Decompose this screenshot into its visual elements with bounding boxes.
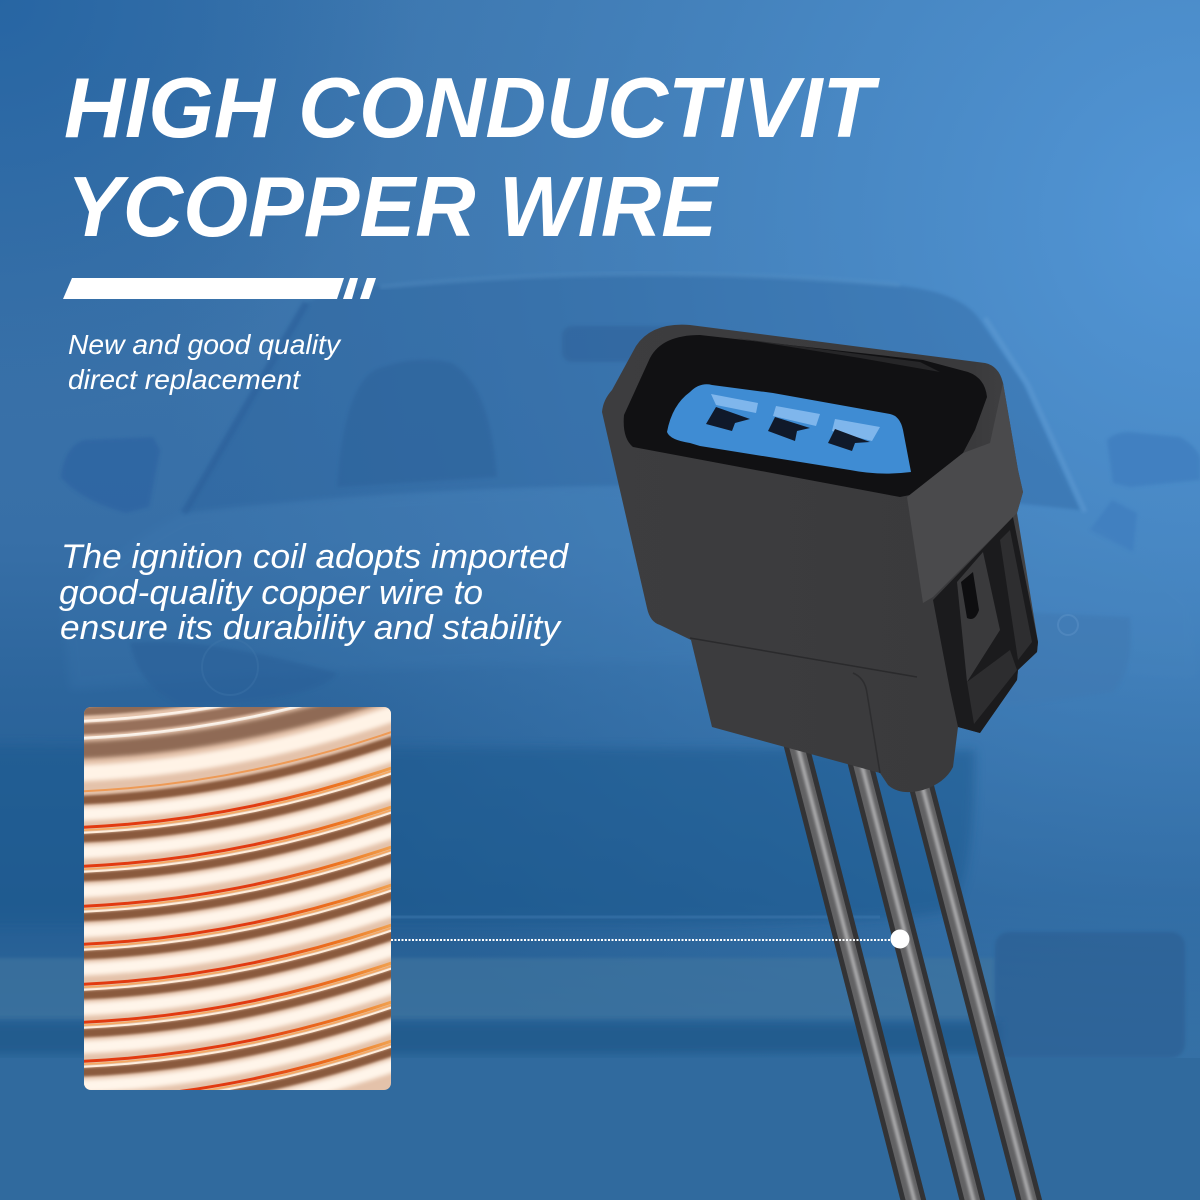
- terminal slot 1: [706, 407, 750, 431]
- wire 1: [795, 740, 922, 1200]
- rim glint: [735, 338, 940, 372]
- interior mirror: [562, 326, 692, 362]
- driver seat: [337, 360, 497, 487]
- blue terminal block: [667, 384, 911, 474]
- car roof edge: [380, 274, 900, 287]
- right wing mirror: [1090, 432, 1200, 552]
- latch lower tab: [967, 650, 1017, 724]
- copper wire coil photo: [84, 707, 391, 1090]
- car windshield: [184, 274, 1080, 513]
- right A-pillar: [985, 318, 1085, 512]
- subtitle: New and good quality: [68, 329, 342, 360]
- terminal highlights: [711, 394, 880, 441]
- left wing mirror: [61, 437, 160, 513]
- lower step line: [690, 638, 917, 677]
- title: YCOPPER WIRE: [67, 160, 719, 255]
- subtitle: [68, 329, 342, 395]
- outer body: [602, 325, 1038, 792]
- wire 3: [921, 785, 1038, 1200]
- left headlight: [130, 642, 337, 707]
- wire 2: [857, 750, 981, 1200]
- terminal slot 3: [828, 429, 870, 451]
- coil turns with red highlights: [84, 766, 391, 1090]
- subtitle: direct replacement: [68, 364, 301, 395]
- right headlight ring: [1058, 615, 1078, 635]
- right chamfer face: [907, 383, 1023, 603]
- right headlight: [1000, 612, 1131, 707]
- road fog: [0, 1058, 1200, 1200]
- latch recess: [933, 517, 1038, 733]
- left A-pillar: [184, 303, 306, 513]
- dotted callout line: [391, 939, 900, 941]
- bumper line: [390, 916, 880, 918]
- right tire block: [995, 932, 1185, 1058]
- left headlight ring: [202, 639, 258, 695]
- title underline bar: [63, 278, 376, 299]
- callout dot: [890, 930, 910, 948]
- terminal slot 2: [768, 417, 810, 441]
- connector housing: [602, 325, 1038, 792]
- fog band over bumper: [0, 958, 995, 1020]
- hood: [62, 487, 1197, 690]
- description text: The ignition coil adopts imported: [61, 538, 569, 576]
- top coil turns: [84, 707, 391, 823]
- latch right strip: [1000, 530, 1032, 660]
- title: HIGH CONDUCTIVIT: [64, 61, 880, 156]
- dark shadow below bumper: [0, 1022, 1000, 1054]
- title: [64, 61, 880, 255]
- car front fascia: [0, 745, 975, 925]
- description text: [59, 538, 569, 647]
- latch window: [961, 572, 979, 619]
- three wires: [795, 740, 1038, 1200]
- latch centre panel: [957, 552, 1000, 682]
- description text: ensure its durability and stability: [60, 609, 562, 647]
- description text: good-quality copper wire to: [59, 574, 483, 612]
- inner cavity: [624, 335, 987, 497]
